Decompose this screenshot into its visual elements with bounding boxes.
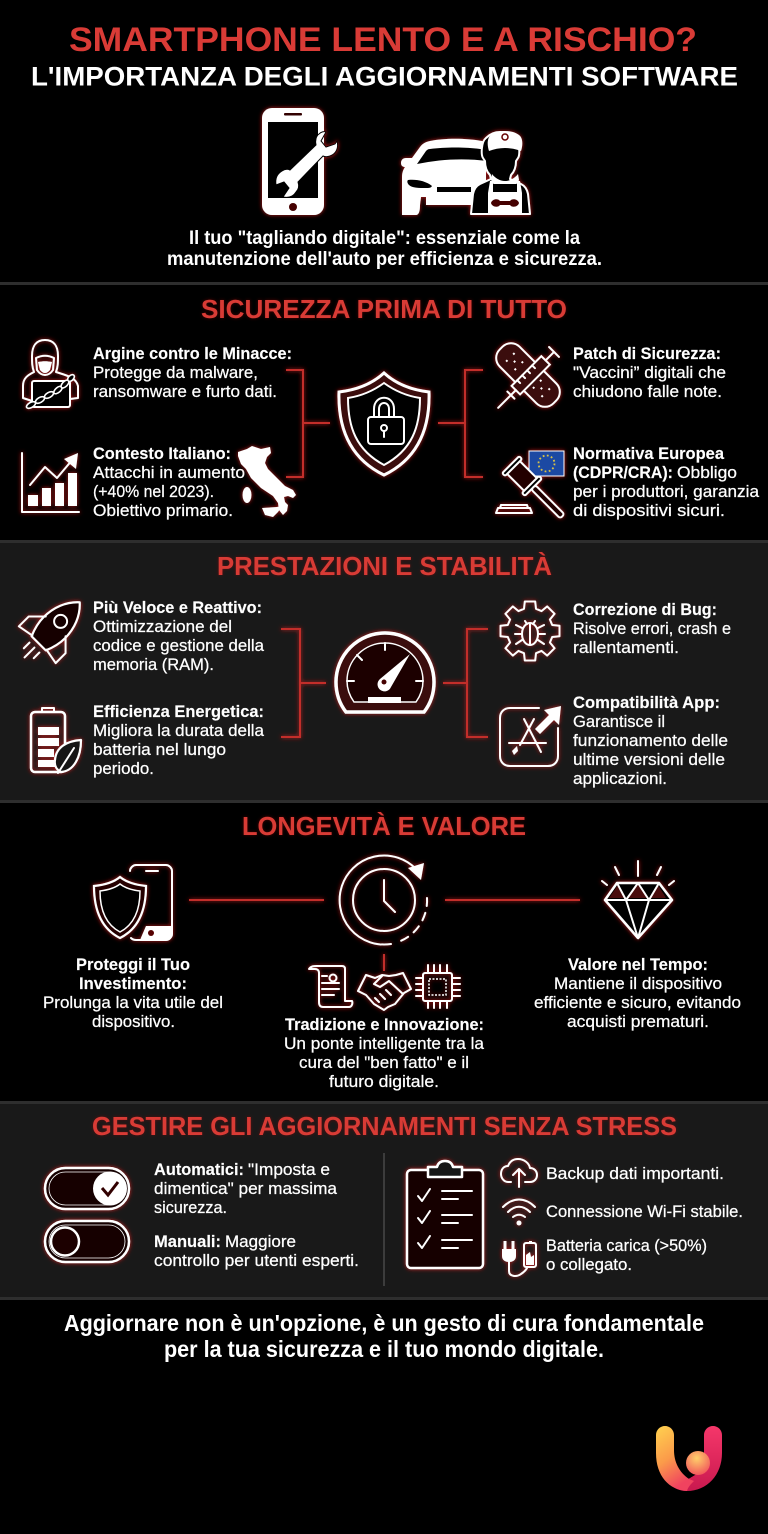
- icon: handshake: [358, 973, 411, 1010]
- panel: sicurezza: [0, 282, 768, 525]
- panel: gestire gli aggiornamenti: [0, 1101, 768, 1300]
- item: tradizione e innovazione: [284, 1015, 485, 1091]
- text: Normativa Europea: [573, 444, 725, 463]
- item: compatibilita app: [500, 693, 728, 788]
- item: contesto italiano: (+40% nel 2023).: [93, 482, 214, 501]
- intro text: [167, 228, 602, 270]
- item: normativa europea: di dispositivi sicuri.: [573, 501, 725, 520]
- connector lines: [281, 629, 488, 737]
- text: Argine contro le Minacce:: [93, 344, 292, 363]
- item: efficienza energetica: Migliora la durata della: [93, 721, 265, 740]
- text: Backup dati importanti.: [546, 1164, 724, 1183]
- item: argine contro le minacce: [23, 340, 292, 410]
- icon: gavel and eu flag: [496, 451, 571, 525]
- icon: plug and battery: [502, 1241, 536, 1276]
- icon: gear with bug: [500, 602, 560, 660]
- item: proteggi il tuo investimento: [43, 955, 223, 1031]
- connector lines: [286, 370, 483, 477]
- item: efficienza energetica: [31, 702, 265, 778]
- text: Compatibilità App:: [573, 693, 720, 712]
- closing statement: per la tua sicurezza e il tuo mondo digitale.: [164, 1336, 604, 1362]
- heading: GESTIRE GLI AGGIORNAMENTI SENZA STRESS: [92, 1111, 677, 1141]
- item: piu veloce: codice e gestione della: [93, 636, 265, 655]
- item: valore nel tempo: Valore nel Tempo:: [568, 955, 708, 974]
- text: Correzione di Bug:: [573, 600, 717, 619]
- item: valore nel tempo: efficiente e sicuro, evitando: [534, 993, 741, 1012]
- icon: rising bar chart: [22, 453, 79, 512]
- item: proteggi il tuo investimento: Prolunga la vita utile del: [43, 993, 223, 1012]
- closing statement: [64, 1310, 704, 1362]
- text: manuali: Maggiore: [225, 1232, 296, 1251]
- panel: prestazioni: [0, 540, 768, 801]
- item: contesto italiano: Obiettivo primario.: [93, 501, 233, 520]
- heading: PRESTAZIONI E STABILITÀ: [217, 551, 552, 581]
- text: automatici: sicurezza.: [154, 1198, 227, 1217]
- item: tradizione e innovazione: Tradizione e Innovazione:: [285, 1015, 484, 1034]
- text: manuali: Manuali:: [154, 1232, 221, 1251]
- closing statement: Aggiornare non è un'opzione, è un gesto di cura fondamentale: [64, 1310, 704, 1336]
- item: efficienza energetica: periodo.: [93, 759, 154, 778]
- item: tradizione e innovazione: cura del "ben fatto" e il: [299, 1053, 469, 1072]
- item: correzione di bug: Risolve errori, crash e: [573, 619, 731, 638]
- icons: tradition and innovation: [309, 965, 460, 1010]
- icon: app store with arrow: [500, 706, 561, 766]
- item: contesto italiano: [22, 444, 296, 520]
- item: battery: o collegato.: [546, 1255, 632, 1274]
- heading: LONGEVITÀ E VALORE: [242, 811, 526, 841]
- icon: car and mechanic: [401, 131, 530, 215]
- icon: map of italy: [238, 446, 296, 517]
- icon: phone and shield: [94, 865, 172, 940]
- logo: [656, 1426, 722, 1491]
- icon: battery with leaf: [31, 708, 81, 773]
- text: Batteria carica (>50%): [546, 1236, 707, 1255]
- item: battery: [502, 1236, 707, 1276]
- item: valore nel tempo: [534, 955, 741, 1031]
- icon: rocket: [6, 584, 98, 676]
- icon: diamond: [602, 861, 674, 938]
- item: contesto italiano: Attacchi in aumento: [93, 463, 245, 482]
- item: patch di sicurezza: [491, 338, 726, 413]
- text: Efficienza Energetica:: [93, 702, 264, 721]
- text: Più Veloce e Reattivo:: [93, 598, 262, 617]
- text: automatici: [154, 1160, 338, 1217]
- item: valore nel tempo: Mantiene il dispositivo: [554, 974, 722, 993]
- item: compatibilita app: funzionamento delle: [573, 731, 728, 750]
- icon: shield with lock: [339, 373, 429, 475]
- intro text: Il tuo "tagliando digitale": essenziale come la: [189, 228, 580, 249]
- item: proteggi il tuo investimento: dispositivo.: [92, 1012, 175, 1031]
- item: piu veloce: memoria (RAM).: [93, 655, 214, 674]
- icon: toggle off: [45, 1221, 129, 1262]
- item: correzione di bug: rallentamenti.: [573, 638, 679, 657]
- item: compatibilita app: applicazioni.: [573, 769, 667, 788]
- text: manuali: [154, 1232, 359, 1270]
- header panel: [31, 21, 738, 270]
- text: Connessione Wi-Fi stabile.: [546, 1202, 743, 1221]
- title: SMARTPHONE LENTO E A RISCHIO?: [69, 21, 697, 59]
- item: tradizione e innovazione: Un ponte intelligente tra la: [284, 1034, 485, 1053]
- item: normativa europea: [496, 444, 760, 525]
- item: proteggi il tuo investimento: Investimento:: [79, 974, 187, 993]
- text: automatici: dimentica" per massima: [154, 1179, 338, 1198]
- panel: longevita: [0, 800, 768, 1091]
- item: normativa europea: Obbligo: [677, 463, 737, 482]
- icon: scroll: [309, 966, 352, 1007]
- item: compatibilita app: ultime versioni delle: [573, 750, 725, 769]
- icon: hacker: [23, 340, 78, 410]
- icon: wifi: [503, 1200, 535, 1226]
- item: normativa europea: (CDPR/CRA):: [573, 463, 673, 482]
- item: patch di sicurezza: chiudono falle note.: [573, 382, 722, 401]
- icon: bandage and syringe: [491, 338, 565, 413]
- subtitle: L'IMPORTANZA DEGLI AGGIORNAMENTI SOFTWARE: [31, 62, 738, 92]
- item: valore nel tempo: acquisti prematuri.: [567, 1012, 709, 1031]
- icon: speedometer: [336, 633, 434, 712]
- text: automatici: Automatici:: [154, 1160, 244, 1179]
- intro text: manutenzione dell'auto per efficienza e sicurezza.: [167, 249, 602, 270]
- icon: clock with arrow: [340, 856, 427, 945]
- item: normativa europea: per i produttori, garanzia: [573, 482, 760, 501]
- heading: SICUREZZA PRIMA DI TUTTO: [201, 294, 567, 324]
- item: compatibilita app: Garantisce il: [573, 712, 665, 731]
- item: wifi: [503, 1200, 743, 1226]
- item: piu veloce: [6, 584, 265, 676]
- text: Contesto Italiano:: [93, 444, 231, 463]
- icon: chip: [416, 965, 460, 1008]
- item: backup: [501, 1159, 724, 1187]
- connector lines: [189, 900, 580, 971]
- icon: smartphone with wrench: [262, 108, 338, 215]
- icon: checklist clipboard: [407, 1161, 483, 1268]
- item: tradizione e innovazione: futuro digitale.: [329, 1072, 439, 1091]
- text: Patch di Sicurezza:: [573, 344, 721, 363]
- text: automatici: "Imposta e: [248, 1160, 330, 1179]
- item: piu veloce: Ottimizzazione del: [93, 617, 232, 636]
- item: efficienza energetica: batteria nel lungo: [93, 740, 226, 759]
- item: correzione di bug: [500, 600, 731, 660]
- item: argine contro le minacce: ransomware e furto dati.: [93, 382, 277, 401]
- item: proteggi il tuo investimento: Proteggi il Tuo: [76, 955, 190, 974]
- item: argine contro le minacce: Protegge da malware,: [93, 363, 258, 382]
- text: manuali: controllo per utenti esperti.: [154, 1251, 359, 1270]
- icon: cloud upload: [501, 1159, 537, 1187]
- item: patch di sicurezza: "Vaccini” digitali che: [573, 363, 726, 382]
- icon: toggle on: [45, 1168, 129, 1209]
